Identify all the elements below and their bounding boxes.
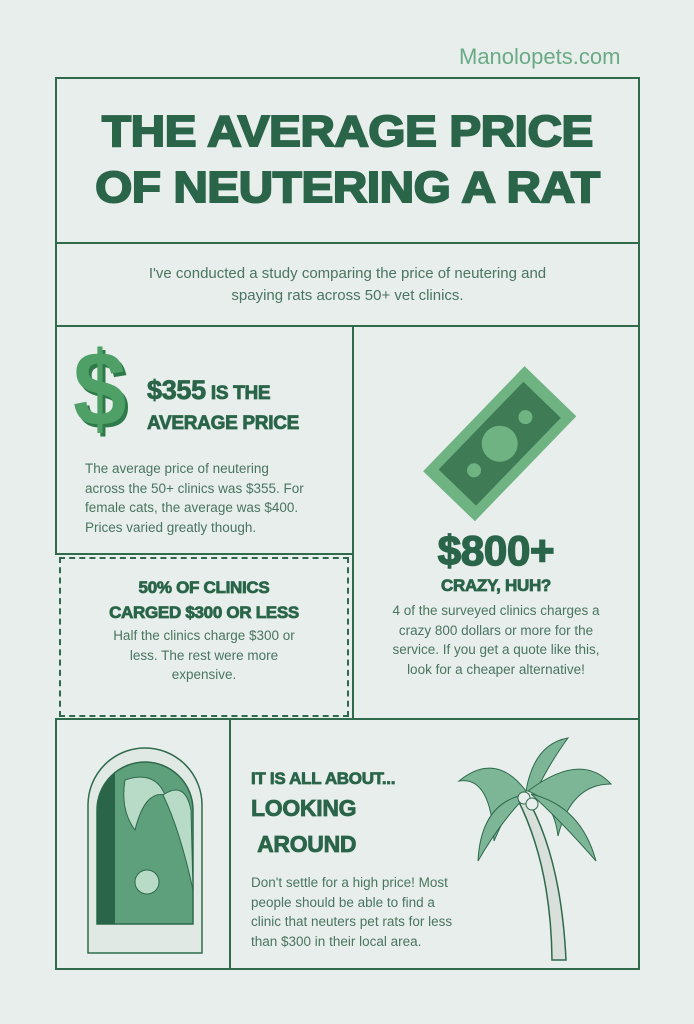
heading: looking around: LOOKING: [251, 795, 356, 821]
text: half: [113, 628, 295, 682]
text: half: expensive.: [172, 667, 236, 682]
heading: 50%: CARGED $300 OR LESS: [109, 603, 299, 622]
icon: arch window: [87, 747, 203, 954]
icon: dollar sign: $: [73, 331, 126, 448]
panel: title: [55, 77, 640, 244]
heading: 50%: [109, 578, 299, 622]
heading: looking around: AROUND: [257, 831, 356, 857]
title: [95, 107, 601, 212]
intro text: spaying rats across 50+ vet clinics.: [231, 287, 464, 304]
text: half: Half the clinics charge $300 or: [113, 628, 295, 643]
panel: intro: [55, 242, 640, 327]
text: don't settle: people should be able to find a: [251, 894, 435, 910]
heading: $800+: $800+: [438, 527, 554, 574]
icon: palm tree: [457, 737, 612, 961]
site name: Manolopets.com: [459, 44, 620, 69]
title: OF NEUTERING A RAT: [95, 163, 600, 212]
text: don't settle: [251, 875, 452, 948]
text: don't settle: Don't settle for a high price! Most: [251, 875, 448, 890]
panel: 50% of clinics: [59, 557, 349, 717]
heading: looking around: IT IS ALL ABOUT...: [251, 769, 395, 788]
panel: $800+: [352, 325, 640, 720]
text: average: The average price of neutering: [85, 461, 269, 476]
panel: bottom left: [55, 718, 231, 970]
text: average: across the 50+ clinics was $355. For: [85, 480, 304, 496]
intro text: I've conducted a study comparing the price of neutering and: [149, 265, 546, 282]
icon: banknote: [423, 366, 576, 522]
text: average: [85, 461, 304, 535]
heading: 50%: 50% OF CLINICS: [139, 578, 269, 597]
subheading: crazy: CRAZY, HUH?: [441, 576, 551, 595]
text: 800: service. If you get a quote like this,: [392, 642, 600, 657]
text: average: female cats, the average was $400.: [85, 500, 298, 515]
text: 800: [392, 603, 600, 677]
heading: $355: $355 IS THE: [147, 375, 270, 405]
text: 800: look for a cheaper alternative!: [407, 662, 585, 676]
text: don't settle: than $300 in their local area.: [251, 934, 421, 948]
heading: $355: AVERAGE PRICE: [147, 413, 299, 434]
heading: $355: [146, 375, 299, 434]
title: THE AVERAGE PRICE: [102, 107, 593, 156]
text: half: less. The rest were more: [130, 648, 278, 662]
text: 800: 4 of the surveyed clinics charges a: [392, 603, 600, 618]
text: 800: crazy 800 dollars or more for the: [399, 622, 593, 638]
text: don't settle: clinic that neuters pet rats for less: [251, 914, 452, 929]
text: average: Prices varied greatly though.: [85, 520, 256, 534]
heading: looking around: [251, 769, 395, 857]
intro text: [149, 265, 546, 304]
panel: looking around: [229, 718, 640, 970]
panel: average price: [55, 325, 354, 555]
